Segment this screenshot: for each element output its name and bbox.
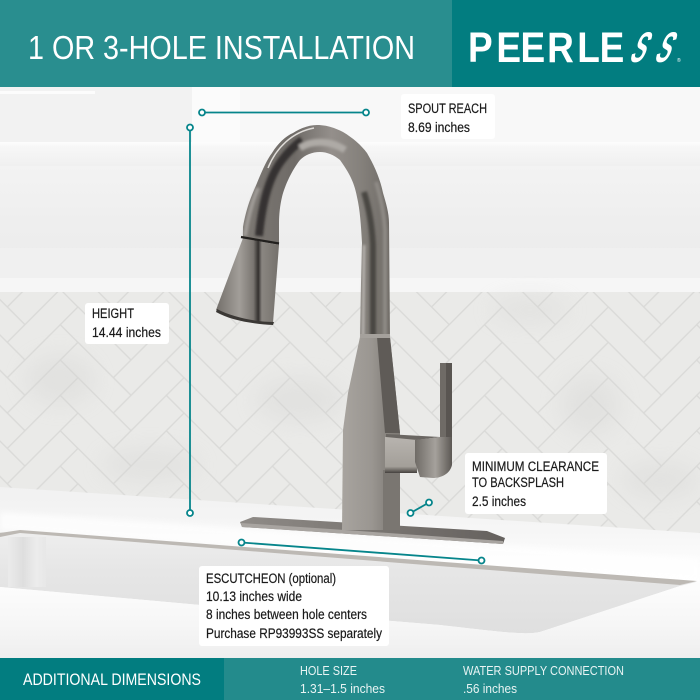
footer values panel — [0, 658, 700, 700]
label: escutcheon: Purchase RP93993SS separately — [206, 626, 382, 641]
dimension: escutcheon width — [238, 540, 484, 564]
hole size — [300, 663, 385, 696]
pull-down spray head — [216, 237, 279, 325]
label: spout reach: SPOUT REACH — [408, 101, 487, 116]
label: height — [85, 303, 169, 344]
title panel — [0, 0, 452, 87]
label: escutcheon: 10.13 inches wide — [206, 589, 302, 604]
escutcheon plate — [240, 517, 505, 544]
Peerless logo: ® — [677, 57, 681, 64]
label: spout reach — [401, 94, 495, 139]
footer heading: ADDITIONAL DIMENSIONS — [23, 671, 201, 689]
label: escutcheon — [199, 566, 389, 646]
dimension: height — [187, 124, 193, 516]
gooseneck spout — [243, 125, 390, 340]
label: minimum clearance: 2.5 inches — [472, 494, 526, 509]
Peerless logo: PEERLE — [468, 24, 624, 72]
label: spout reach: 8.69 inches — [408, 120, 470, 135]
label: height: 14.44 inches — [92, 325, 161, 340]
label: escutcheon: 8 inches between hole centers — [206, 607, 367, 622]
logo panel — [452, 0, 700, 87]
lever handle — [385, 363, 452, 478]
label: minimum clearance: TO BACKSPLASH — [472, 475, 564, 490]
dimension: spout reach — [199, 110, 369, 116]
hole size: 1.31–1.5 inches — [300, 681, 385, 696]
faucet body — [342, 334, 400, 530]
header band — [0, 0, 700, 87]
label: height: HEIGHT — [92, 306, 134, 321]
label: escutcheon: ESCUTCHEON (optional) — [206, 571, 336, 586]
water supply connection: .56 inches — [463, 681, 517, 696]
hole size: HOLE SIZE — [300, 663, 357, 678]
water supply connection — [463, 663, 624, 696]
Peerless logo: SS — [624, 23, 685, 71]
title: 1 OR 3-HOLE INSTALLATION — [28, 30, 415, 67]
water supply connection: WATER SUPPLY CONNECTION — [463, 663, 624, 678]
faucet — [216, 125, 505, 544]
footer band — [0, 658, 700, 700]
label: minimum clearance — [465, 453, 607, 514]
dimension: clearance to backsplash — [408, 500, 432, 516]
footer heading panel — [0, 658, 224, 700]
label: minimum clearance: MINIMUM CLEARANCE — [472, 459, 599, 474]
